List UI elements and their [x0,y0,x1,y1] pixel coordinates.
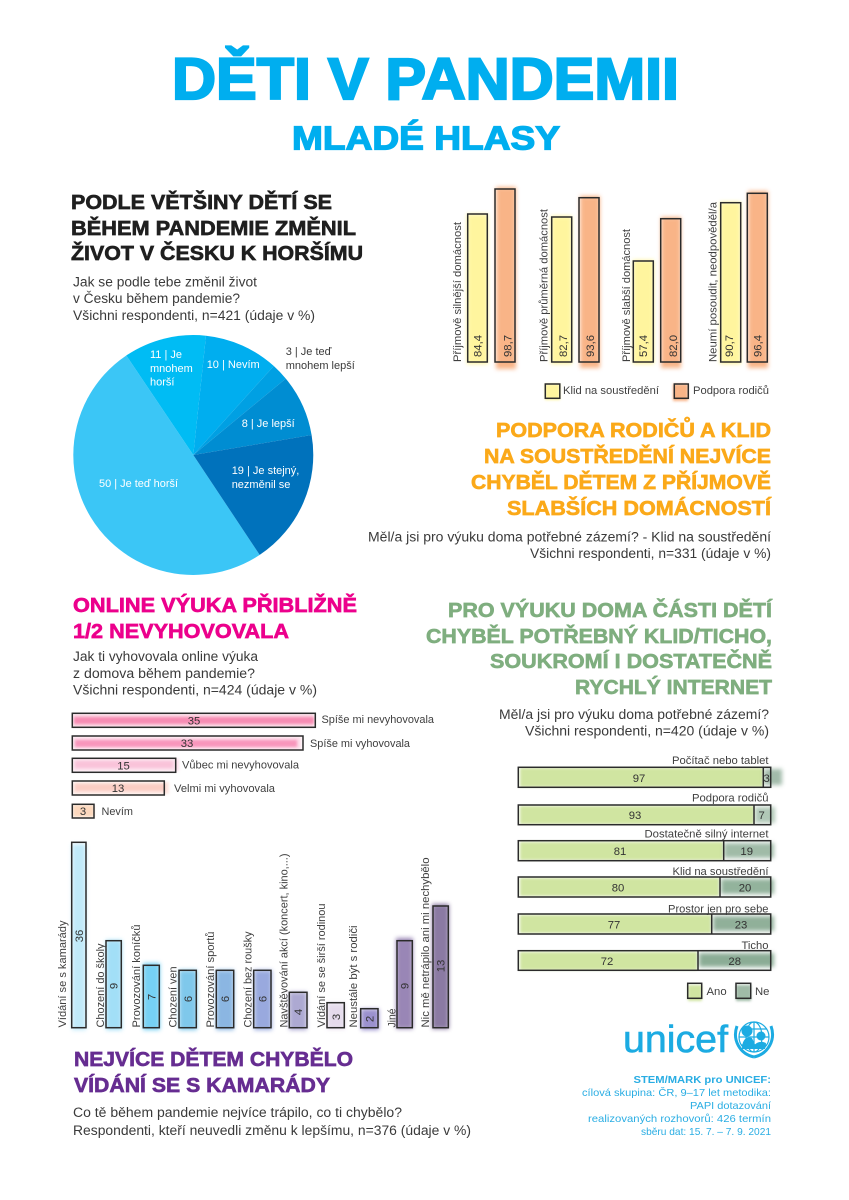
bar chart: what children missed: 7 [146,994,158,1000]
heading: parents support and calm: PODPORA RODIČŮ A KLID [496,416,771,442]
stacked bar chart: home conditions: 81 [614,846,626,858]
unicef logo: unicef [623,1019,728,1061]
bar chart: online learning: Velmi mi vyhovovala [174,783,276,795]
heading: parents support and calm: CHYBĚL DĚTEM Z PŘÍJMOVĚ [471,470,771,494]
bar chart: online learning: Vůbec mi nevyhovovala [182,760,300,772]
bar chart: what children missed: Neustále být s rodiči [348,926,360,1028]
question text: home conditions [499,707,769,738]
question text: calm: Všichni respondenti, n=331 (údaje v %) [530,546,771,561]
footer: methodology: PAPI dotazování [690,1100,771,1112]
question text: online learning: Všichni respondenti, n=424 (údaje v %) [73,682,317,698]
grouped bar chart: income households: 93,6 [585,335,597,357]
grouped bar chart: income households: Příjmově silnější domácnost [452,221,464,362]
question text: missing: Co tě během pandemie nejvíce trápilo, co ti chybělo? [73,1105,402,1120]
bar chart: what children missed: 4 [293,1009,305,1015]
heading: parents support and calm [471,416,772,520]
grouped bar chart: income households: 98,7 [502,335,514,357]
grouped bar chart: income households: 82,0 [668,335,680,357]
bar chart: online learning: Spíše mi vyhovovala [310,738,411,750]
heading: life got worse: PODLE VĚTŠINY DĚTÍ SE [71,190,332,214]
grouped bar chart: income households: 90,7 [724,335,736,357]
heading: lack of calm: RYCHLÝ INTERNET [575,675,772,699]
heading: missing friends: NEJVÍCE DĚTEM CHYBĚLO [74,1047,353,1071]
stacked bar chart: home conditions: 77 [608,920,620,932]
heading: missing friends: VÍDÁNÍ SE S KAMARÁDY [74,1074,330,1097]
pie chart: life change: mnohem lepší [286,360,355,372]
question text: life change: Všichni respondenti, n=421 (údaje v %) [73,308,315,323]
bar chart: what children missed [57,842,449,1030]
heading: online learning [73,593,357,643]
grouped bar chart: income households: 82,7 [558,335,570,357]
bar chart: what children missed: Vídání se se širší rodinou [316,904,328,1028]
stacked bar chart: home conditions: 72 [601,956,613,968]
stacked bar chart: home conditions: Klid na soustředění [672,866,769,878]
heading: online learning: ONLINE VÝUKA PŘIBLIŽNĚ [73,593,357,617]
bar chart: online learning: 3 [80,806,86,818]
grouped bar chart: income households: Neumí posoudit, neodpověděl/a [708,201,720,362]
bar chart: online learning [72,713,435,818]
stacked bar chart: home conditions [518,755,782,970]
legend: home conditions: Ne [755,986,769,998]
pie chart: life change: 3 | Je teď [286,346,332,358]
stacked bar chart: home conditions: 23 [735,920,747,932]
legend: income households: Klid na soustředění [563,385,660,397]
grouped bar chart: income households: Příjmově průměrná domácnost [538,208,550,362]
stacked bar chart: home conditions: Ticho [742,940,768,952]
bar chart: online learning: 35 [188,716,200,728]
bar chart: what children missed: 6 [258,996,270,1002]
pie chart: life change: 11 | Je [150,349,182,361]
footer: methodology: sběru dat: 15. 7. – 7. 9. 2021 [641,1126,771,1138]
pie chart: life change: 19 | Je stejný, [232,465,299,477]
heading: life got worse: BĚHEM PANDEMIE ZMĚNIL [71,216,356,240]
heading: lack of calm [426,598,773,699]
pie chart: life change: 8 | Je lepší [242,418,295,430]
heading: lack of calm: CHYBĚL POTŘEBNÝ KLID/TICHO, [426,624,772,648]
heading: parents support and calm: NA SOUSTŘEDĚNÍ NEJVÍCE [484,444,771,468]
pie chart: life change: mnohem [150,363,193,375]
heading: parents support and calm: SLABŠÍCH DOMÁCNOSTÍ [507,496,772,520]
bar chart: what children missed: Chození bez roušky [242,931,254,1028]
stacked bar chart: home conditions: Dostatečně silný internet [644,828,769,840]
pie chart: life change: nezměnil se [232,479,290,491]
stacked bar chart: home conditions: 97 [633,773,645,785]
bar chart: online learning: 13 [112,783,124,795]
pie chart: life change: horší [150,376,174,388]
legend: home conditions [688,983,769,1001]
heading: life got worse: ŽIVOT V ČESKU K HORŠÍMU [71,241,363,265]
bar chart: what children missed: 3 [331,1014,343,1020]
stacked bar chart: home conditions: 93 [629,810,641,822]
heading: online learning: 1/2 NEVYHOVOVALA [73,620,289,643]
grouped bar chart: income households: Příjmově slabší domácnost [621,228,633,362]
bar chart: online learning: Spíše mi nevyhovovala [322,714,435,726]
bar chart: what children missed: Chození ven [168,966,180,1028]
heading: lack of calm: PRO VÝUKU DOMA ČÁSTI DĚTÍ [448,598,773,622]
pie chart: life change: 50 | Je teď horší [99,478,178,490]
question text: life change: Jak se podle tebe změnil život [73,274,257,290]
bar chart: what children missed: Nic mě netrápilo ani mi nechybělo [420,858,432,1028]
legend: income households [545,384,769,401]
bar chart: what children missed: 2 [364,1016,376,1022]
icon: unicef emblem [736,1022,772,1057]
stacked bar chart: home conditions: Prostor jen pro sebe [668,904,768,916]
bar chart: what children missed: Provozování sportů [205,932,217,1028]
bar chart: what children missed: Chození do školy [95,943,107,1028]
subtitle: MLADÉ HLASY [292,120,560,156]
question text: home conditions: Měl/a jsi pro výuku doma potřebné zázemí? [499,707,769,722]
grouped bar chart: income households: 57,4 [638,335,650,357]
bar chart: what children missed: 6 [183,996,195,1002]
bar chart: what children missed: 13 [436,960,448,972]
legend: home conditions: Ano [706,986,727,998]
stacked bar chart: home conditions: 20 [739,882,751,894]
footer: methodology: cílová skupina: ČR, 9–17 let metodika: [582,1086,771,1099]
question text: missing: Respondenti, kteří neuvedli změnu k lepšímu, n=376 (údaje v %) [73,1123,471,1138]
question text: life change: v Česku během pandemie? [73,291,240,306]
grouped bar chart: income households: 84,4 [473,335,485,357]
question text: calm: Měl/a jsi pro výuku doma potřebné zázemí? - Klid na soustředění [368,530,771,544]
question text: life change [73,274,315,323]
legend: income households: Podpora rodičů [693,385,769,397]
bar chart: what children missed: Vídání se s kamarády [57,920,69,1028]
footer: methodology: realizovaných rozhovorů: 426 termín [588,1113,771,1125]
grouped bar chart: income households [452,187,768,369]
question text: calm [368,530,771,561]
footer: methodology: STEM/MARK pro UNICEF: [634,1074,771,1086]
pie chart: life change: 10 | Nevím [207,359,260,371]
bar chart: what children missed: 36 [74,930,86,942]
heading: lack of calm: SOUKROMÍ I DOSTATEČNĚ [490,649,772,673]
bar chart: what children missed: 9 [400,983,412,989]
question text: online learning: Jak ti vyhovovala online výuka [73,649,258,664]
stacked bar chart: home conditions: 80 [612,882,624,894]
heading: life got worse [71,190,363,265]
footer: methodology [582,1074,771,1138]
unicef logo [623,1019,772,1061]
title: DĚTI V PANDEMII [172,47,679,112]
bar chart: online learning: Nevím [102,806,133,818]
question text: missing [73,1105,471,1138]
question text: home conditions: Všichni respondenti, n=420 (údaje v %) [525,724,769,738]
bar chart: what children missed: 9 [108,983,120,989]
pie chart: life change [73,335,355,575]
question text: online learning [73,649,317,698]
stacked bar chart: home conditions: Počítač nebo tablet [672,755,769,767]
stacked bar chart: home conditions: Podpora rodičů [692,792,768,804]
grouped bar chart: income households: 96,4 [753,335,765,357]
bar chart: what children missed: Provozování koníčků [131,924,143,1028]
bar chart: what children missed: Navštěvování akcí (koncert, kino,...) [278,853,290,1028]
bar chart: what children missed: 6 [220,996,232,1002]
bar chart: online learning: 15 [117,760,130,772]
stacked bar chart: home conditions: 3 [764,773,770,785]
stacked bar chart: home conditions: 28 [728,956,741,968]
stacked bar chart: home conditions: 7 [759,810,765,822]
bar chart: what children missed: Jiné [386,1008,398,1028]
stacked bar chart: home conditions: 19 [740,846,753,858]
heading: missing friends [74,1047,353,1097]
bar chart: online learning: 33 [181,738,193,750]
question text: online learning: z domova během pandemie? [73,666,255,681]
